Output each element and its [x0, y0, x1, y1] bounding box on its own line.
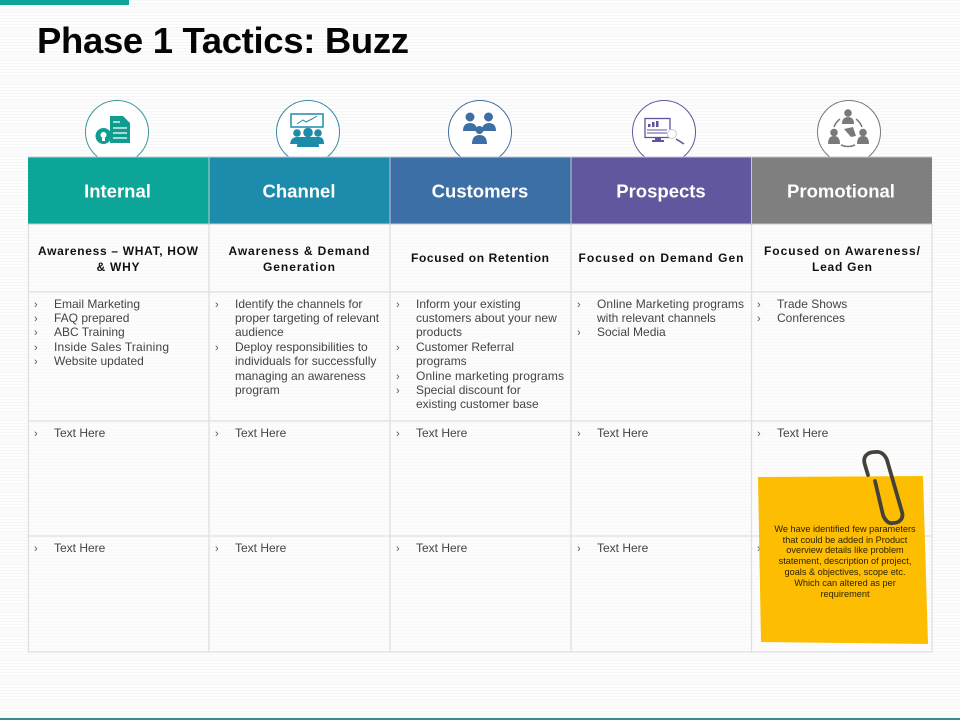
header: Prospects [571, 157, 752, 224]
list: Customers tactics: Inform your existing [416, 297, 521, 311]
header: Promotional: Promotional [787, 180, 895, 202]
list: Internal tactics: Inside Sales Training [54, 340, 169, 354]
row 3 placeholder text: › [757, 543, 761, 555]
subheading: Customers: Focused on Retention [411, 251, 549, 265]
row 2 placeholder text: › [577, 428, 581, 440]
bottom accent bar [0, 718, 960, 720]
icon: monitor with magnifier [632, 100, 696, 164]
row 2 placeholder text: › [215, 428, 219, 440]
list: Customers tactics: Customer Referral [416, 340, 514, 354]
row 2 placeholder text: › [396, 428, 400, 440]
row 2 placeholder text: Text Here [597, 426, 649, 440]
subheading: Promotional: Lead Gen [812, 260, 872, 274]
row 3 placeholder text: Text Here [235, 541, 287, 555]
sticky note callout [758, 476, 928, 644]
icon: presentation audience [276, 100, 340, 164]
list: Promotional tactics: Trade Shows [777, 297, 847, 311]
subheading: Internal [38, 244, 199, 274]
row 2 placeholder text: Text Here [416, 426, 468, 440]
list: Customers tactics: Online marketing programs [416, 369, 564, 383]
subheading: Internal: Awareness – WHAT, HOW [38, 244, 199, 258]
list: Promotional tactics: › [757, 313, 761, 325]
list: Prospects tactics: Social Media [597, 325, 666, 339]
list: Promotional tactics: › [757, 299, 761, 311]
list: Internal tactics: Website updated [54, 354, 144, 368]
header: Channel [209, 157, 390, 224]
list: Internal tactics [34, 297, 169, 368]
list: Channel tactics [215, 297, 380, 397]
list: Customers tactics: › [396, 385, 400, 397]
sticky note callout: that could be added in Product [783, 535, 908, 545]
list: Channel tactics: program [235, 383, 280, 397]
row 3 placeholder text: Text Here [416, 541, 468, 555]
list: Prospects tactics: › [577, 299, 581, 311]
list: Customers tactics: products [416, 325, 462, 339]
sticky note callout: We have identified few parameters [774, 524, 916, 534]
list: Customers tactics: › [396, 342, 400, 354]
list: Internal tactics: FAQ prepared [54, 311, 129, 325]
row 3 placeholder text: › [215, 543, 219, 555]
list: Prospects tactics [577, 297, 744, 339]
icon: promotion network [818, 100, 880, 164]
list: Channel tactics: Identify the channels for [235, 297, 362, 311]
list: Promotional tactics: Conferences [777, 311, 845, 325]
icon: customers group [448, 100, 512, 164]
list: Channel tactics: proper targeting of relevant [235, 311, 380, 325]
header: Channel: Channel [263, 180, 335, 202]
header: Customers [390, 157, 571, 224]
subheading: Internal: & WHY [96, 260, 140, 274]
row 3 placeholder text: › [396, 543, 400, 555]
list: Customers tactics: existing customer base [416, 397, 539, 411]
header dividers [28, 157, 932, 224]
header: Customers: Customers [432, 180, 528, 202]
list: Internal tactics: › [34, 342, 38, 354]
list: Channel tactics: › [215, 342, 219, 354]
list: Internal tactics: Email Marketing [54, 297, 140, 311]
list: Promotional tactics [757, 297, 847, 325]
row 2 placeholder text: Text Here [54, 426, 106, 440]
row 3 placeholder text: Text Here [54, 541, 106, 555]
list: Channel tactics: › [215, 299, 219, 311]
table grid [28, 224, 932, 652]
list: Customers tactics: customers about your new [416, 311, 557, 325]
sticky note callout: statement, description of project, [779, 556, 911, 566]
subheading: Channel: Generation [263, 260, 335, 274]
icon: document and light bulb [86, 100, 148, 164]
list: Channel tactics: Deploy responsibilities to [235, 340, 368, 354]
list: Internal tactics: › [34, 299, 38, 311]
row 3 placeholder text: Text Here [597, 541, 649, 555]
list: Internal tactics: › [34, 327, 38, 339]
header: Internal: Internal [84, 180, 151, 202]
list: Channel tactics: audience [235, 325, 284, 339]
list: Prospects tactics: Online Marketing programs [597, 297, 744, 311]
list: Internal tactics: › [34, 313, 38, 325]
title: Phase 1 Tactics: Buzz [37, 20, 409, 61]
list: Prospects tactics: with relevant channels [596, 311, 716, 325]
list: Customers tactics: Special discount for [416, 383, 521, 397]
row 2 placeholder text: Text Here [777, 426, 829, 440]
list: Channel tactics: managing an awareness [235, 369, 366, 383]
list: Internal tactics: ABC Training [54, 325, 125, 339]
row 2 placeholder text: › [34, 428, 38, 440]
sticky note callout: Which can altered as per [794, 578, 896, 588]
row 2 placeholder text: › [757, 428, 761, 440]
row 3 placeholder text: › [577, 543, 581, 555]
sticky note callout: goals & objectives, scope etc. [784, 567, 906, 577]
header: Internal [28, 157, 209, 224]
row 2 placeholder text: Text Here [235, 426, 287, 440]
row 3 placeholder text: › [34, 543, 38, 555]
list: Customers tactics [396, 297, 564, 411]
subheading: Prospects: Focused on Demand Gen [578, 251, 744, 265]
top accent bar [0, 0, 129, 5]
subheading: Channel [228, 244, 370, 274]
sticky note callout: overview details like problem [786, 545, 904, 555]
list: Channel tactics: individuals for successfully [235, 354, 376, 368]
subheading: Promotional [764, 244, 921, 274]
list: Customers tactics: › [396, 299, 400, 311]
list: Customers tactics: › [396, 371, 400, 383]
list: Prospects tactics: › [577, 327, 581, 339]
subheading: Channel: Awareness & Demand [228, 244, 370, 258]
header: Promotional [752, 157, 932, 224]
list: Internal tactics: › [34, 356, 38, 368]
subheading: Promotional: Focused on Awareness/ [764, 244, 921, 258]
sticky note callout: requirement [820, 589, 870, 599]
row 3 placeholder text [34, 541, 761, 555]
icon: paper clip [864, 452, 902, 523]
row 2 placeholder text [34, 426, 829, 440]
header: Prospects: Prospects [616, 180, 706, 202]
list: Customers tactics: programs [416, 354, 467, 368]
